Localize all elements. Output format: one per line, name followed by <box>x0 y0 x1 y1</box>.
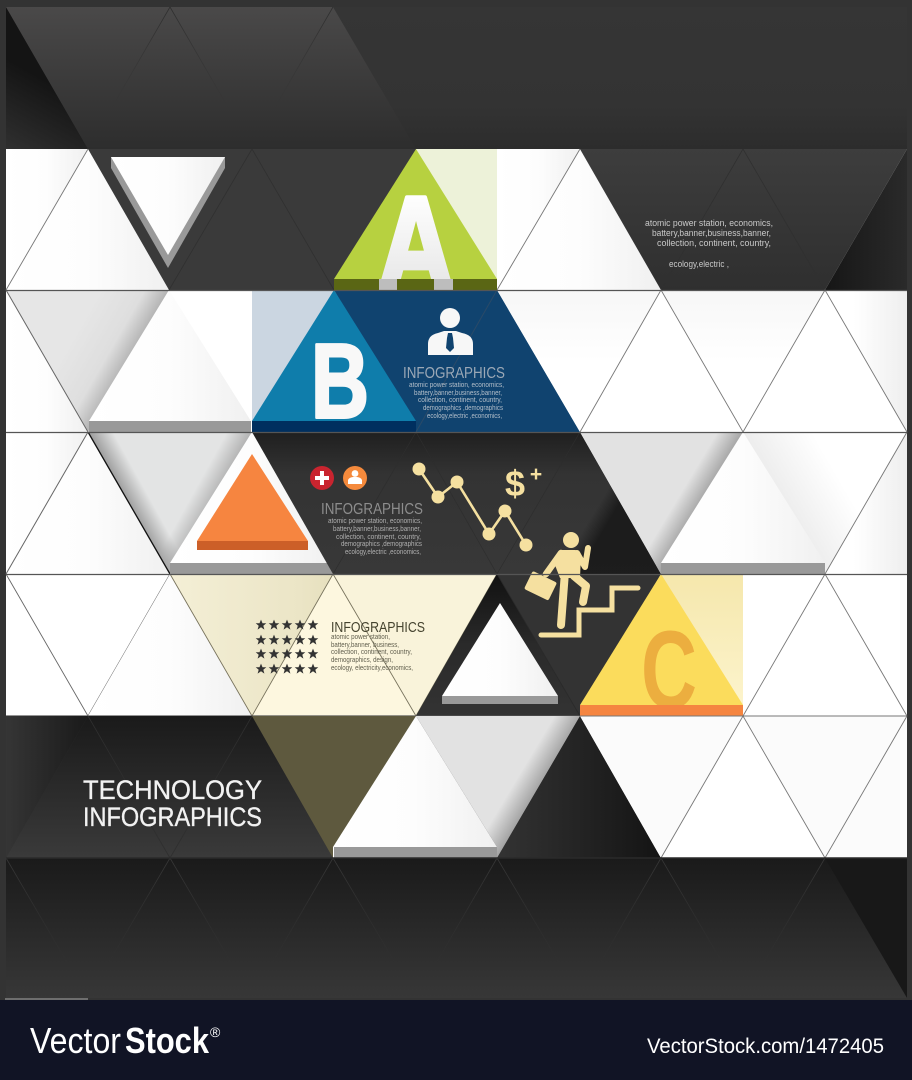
row 5: white triangle with bar <box>333 716 497 858</box>
logo: ® <box>210 1024 221 1040</box>
row 4: left white <box>6 574 252 716</box>
row 3: right folds <box>580 432 907 574</box>
panel: cream block <box>170 574 497 716</box>
text block B: battery,banner,business,banner, <box>414 388 502 397</box>
caption text: atomic power station, economics, <box>645 218 773 228</box>
title: INFOGRAPHICS <box>83 802 262 832</box>
text block dark: atomic power station, economics, <box>328 516 422 525</box>
logo: Stock <box>125 1020 210 1061</box>
text block cream: battery,banner, business, <box>331 640 399 649</box>
logo <box>30 1020 221 1061</box>
text block cream: collection, continent, country, <box>331 647 412 656</box>
title: TECHNOLOGY <box>83 775 262 805</box>
footer image id: VectorStock.com/1472405 <box>647 1035 884 1058</box>
letter C: C <box>641 609 697 732</box>
text block cream: demographics, design, <box>331 655 393 664</box>
letter A: A <box>377 169 455 322</box>
caption text: battery,banner,business,banner, <box>652 228 771 238</box>
heading: infographics dark: INFOGRAPHICS <box>321 501 423 518</box>
text block B: atomic power station, economics, <box>409 380 504 389</box>
icon: dollar plus <box>505 463 542 504</box>
text block B: ecology,electric ,economics, <box>427 411 502 420</box>
logo: Vector <box>30 1020 121 1061</box>
icon: business person <box>428 308 473 355</box>
row 5: title panel <box>6 716 333 858</box>
text block B: demographics ,demographics <box>423 403 503 412</box>
text block B <box>409 380 504 420</box>
icon: red plus <box>310 466 334 490</box>
caption text <box>645 218 773 269</box>
caption text: ecology,electric , <box>669 259 729 269</box>
title <box>83 775 262 832</box>
chart: rising line in cream <box>412 462 532 552</box>
row 5: grey fold <box>416 716 580 858</box>
text block dark: demographics ,demographics <box>341 539 422 548</box>
icon: inverted white triangle <box>111 157 225 268</box>
row 4: right white lines <box>743 574 907 716</box>
row 3: left folds <box>6 432 252 574</box>
icon: dollar plus: $ <box>505 463 525 504</box>
footer bar <box>0 1000 912 1080</box>
bottom dark band <box>5 858 907 999</box>
panel: dark column with small white triangle <box>416 574 661 716</box>
panel A: green triangle <box>334 149 497 322</box>
top dark band <box>6 7 907 149</box>
text block cream: ecology, electricity,economics, <box>331 663 413 672</box>
icon: orange person <box>343 466 367 490</box>
panel B: blue triangle and navy block <box>252 290 580 440</box>
text block dark <box>328 516 422 556</box>
text block B: collection, continent, country, <box>418 395 502 404</box>
text block dark: ecology,electric ,economics, <box>345 547 421 556</box>
row dividers <box>6 290 907 716</box>
panel: dark right top with caption <box>580 149 907 290</box>
icon: star rating grid <box>256 620 318 674</box>
row 2: left white folds <box>6 290 252 432</box>
panel: orange triangle <box>170 432 333 574</box>
icon: dollar plus: + <box>530 463 542 486</box>
caption text: collection, continent, country, <box>657 238 771 248</box>
row 5: dark wedge <box>497 716 661 858</box>
text block cream: atomic power station, <box>331 632 390 641</box>
text block dark: collection, continent, country, <box>336 532 421 541</box>
row 5: right white triangles <box>580 716 907 858</box>
letter B: B <box>311 322 369 440</box>
row 2: right white triangles <box>497 290 907 432</box>
row 1: white folds and dark panel <box>6 149 661 290</box>
row 5: olive triangle <box>252 716 416 858</box>
text block cream <box>331 632 413 672</box>
heading: infographics cream: INFOGRAPHICS <box>331 620 425 636</box>
panel C: yellow triangle <box>580 574 743 732</box>
icon: businessman climbing stairs <box>524 532 638 635</box>
white paper base <box>6 149 907 858</box>
text block dark: battery,banner,business,banner, <box>333 524 421 533</box>
heading: infographics B: INFOGRAPHICS <box>403 365 505 382</box>
panel: dark centre <box>252 432 661 574</box>
